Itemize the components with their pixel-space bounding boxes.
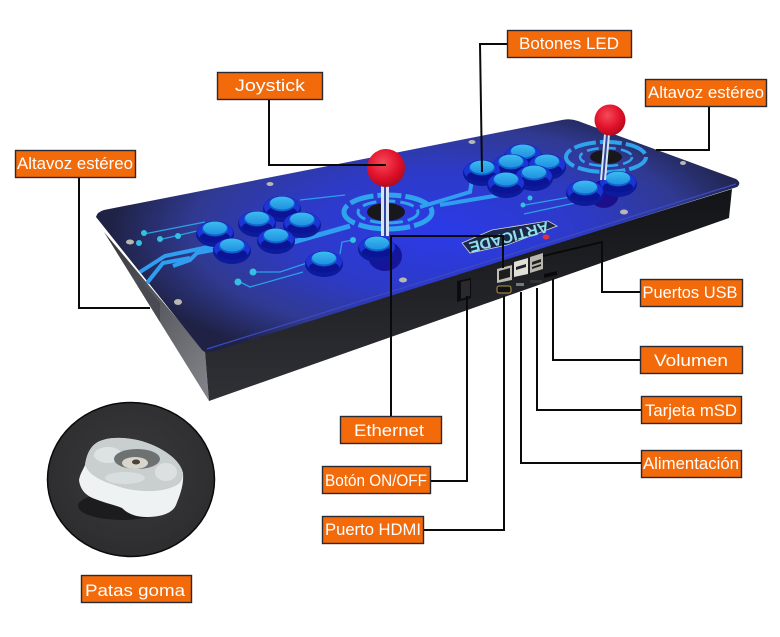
label: Puerto HDMI xyxy=(322,516,424,544)
label: Altavoz estéreo right: Altavoz estéreo xyxy=(648,83,764,102)
right joystick xyxy=(590,104,626,180)
label: Altavoz estéreo left xyxy=(16,150,136,178)
label: Puerto HDMI: Puerto HDMI xyxy=(325,520,421,539)
label: Botón ON/OFF: Botón ON/OFF xyxy=(325,471,427,490)
logo: ARTICADE xyxy=(467,218,551,255)
foot shadow xyxy=(78,492,166,520)
label: Patas goma: Patas goma xyxy=(85,581,186,600)
joystick shadow right xyxy=(589,180,619,208)
label: Botón ON/OFF xyxy=(322,466,430,494)
leader: Volumen xyxy=(553,279,640,360)
label: Tarjeta mSD xyxy=(642,396,742,424)
foot gray ring xyxy=(114,449,160,469)
leader: Alimentacion xyxy=(521,292,641,463)
leader: Puertos USB xyxy=(543,242,640,292)
label: Puertos USB xyxy=(640,280,742,306)
label: Volumen: Volumen xyxy=(654,351,728,370)
label: Joystick xyxy=(218,72,322,100)
label: Ethernet: Ethernet xyxy=(354,421,424,440)
leader: ON/OFF xyxy=(430,296,467,481)
label: Altavoz estéreo left: Altavoz estéreo xyxy=(17,154,133,173)
speaker grille xyxy=(137,277,160,322)
inset: rubber foot xyxy=(48,402,214,556)
label: Ethernet xyxy=(340,416,442,444)
console top panel xyxy=(96,119,739,353)
label: Alimentación: Alimentación xyxy=(643,454,739,473)
buttons right xyxy=(463,144,637,206)
leader: Altavoz right xyxy=(656,106,709,150)
leader: HDMI xyxy=(423,296,504,530)
buttons left xyxy=(196,196,396,277)
leader: Botones LED xyxy=(480,44,507,172)
label: Puertos USB: Puertos USB xyxy=(642,283,738,302)
screws xyxy=(126,140,686,305)
leader: Joystick xyxy=(269,100,386,165)
label: Patas goma xyxy=(82,576,192,602)
label: Joystick: Joystick xyxy=(235,76,306,95)
foot body xyxy=(79,438,183,517)
joystick shadow left xyxy=(368,241,402,271)
label: Botones LED: Botones LED xyxy=(519,34,619,53)
console xyxy=(96,104,739,401)
label: Altavoz estéreo right xyxy=(646,80,766,106)
circuit traces xyxy=(136,180,575,287)
ports xyxy=(497,253,557,293)
leader: Ethernet xyxy=(391,236,503,416)
foot top xyxy=(85,438,183,491)
console front face xyxy=(205,189,732,401)
label: Volumen xyxy=(640,346,742,374)
left joystick xyxy=(367,149,405,236)
label: Alimentación xyxy=(642,450,742,478)
leader: Tarjeta mSD xyxy=(537,288,641,410)
console left side xyxy=(104,232,209,401)
joystick rings xyxy=(344,142,646,229)
panel bottom highlight xyxy=(207,184,736,349)
power switch xyxy=(457,278,471,302)
leader: Altavoz left xyxy=(79,178,150,308)
label: Botones LED xyxy=(508,30,632,58)
label: Tarjeta mSD: Tarjeta mSD xyxy=(645,401,737,420)
